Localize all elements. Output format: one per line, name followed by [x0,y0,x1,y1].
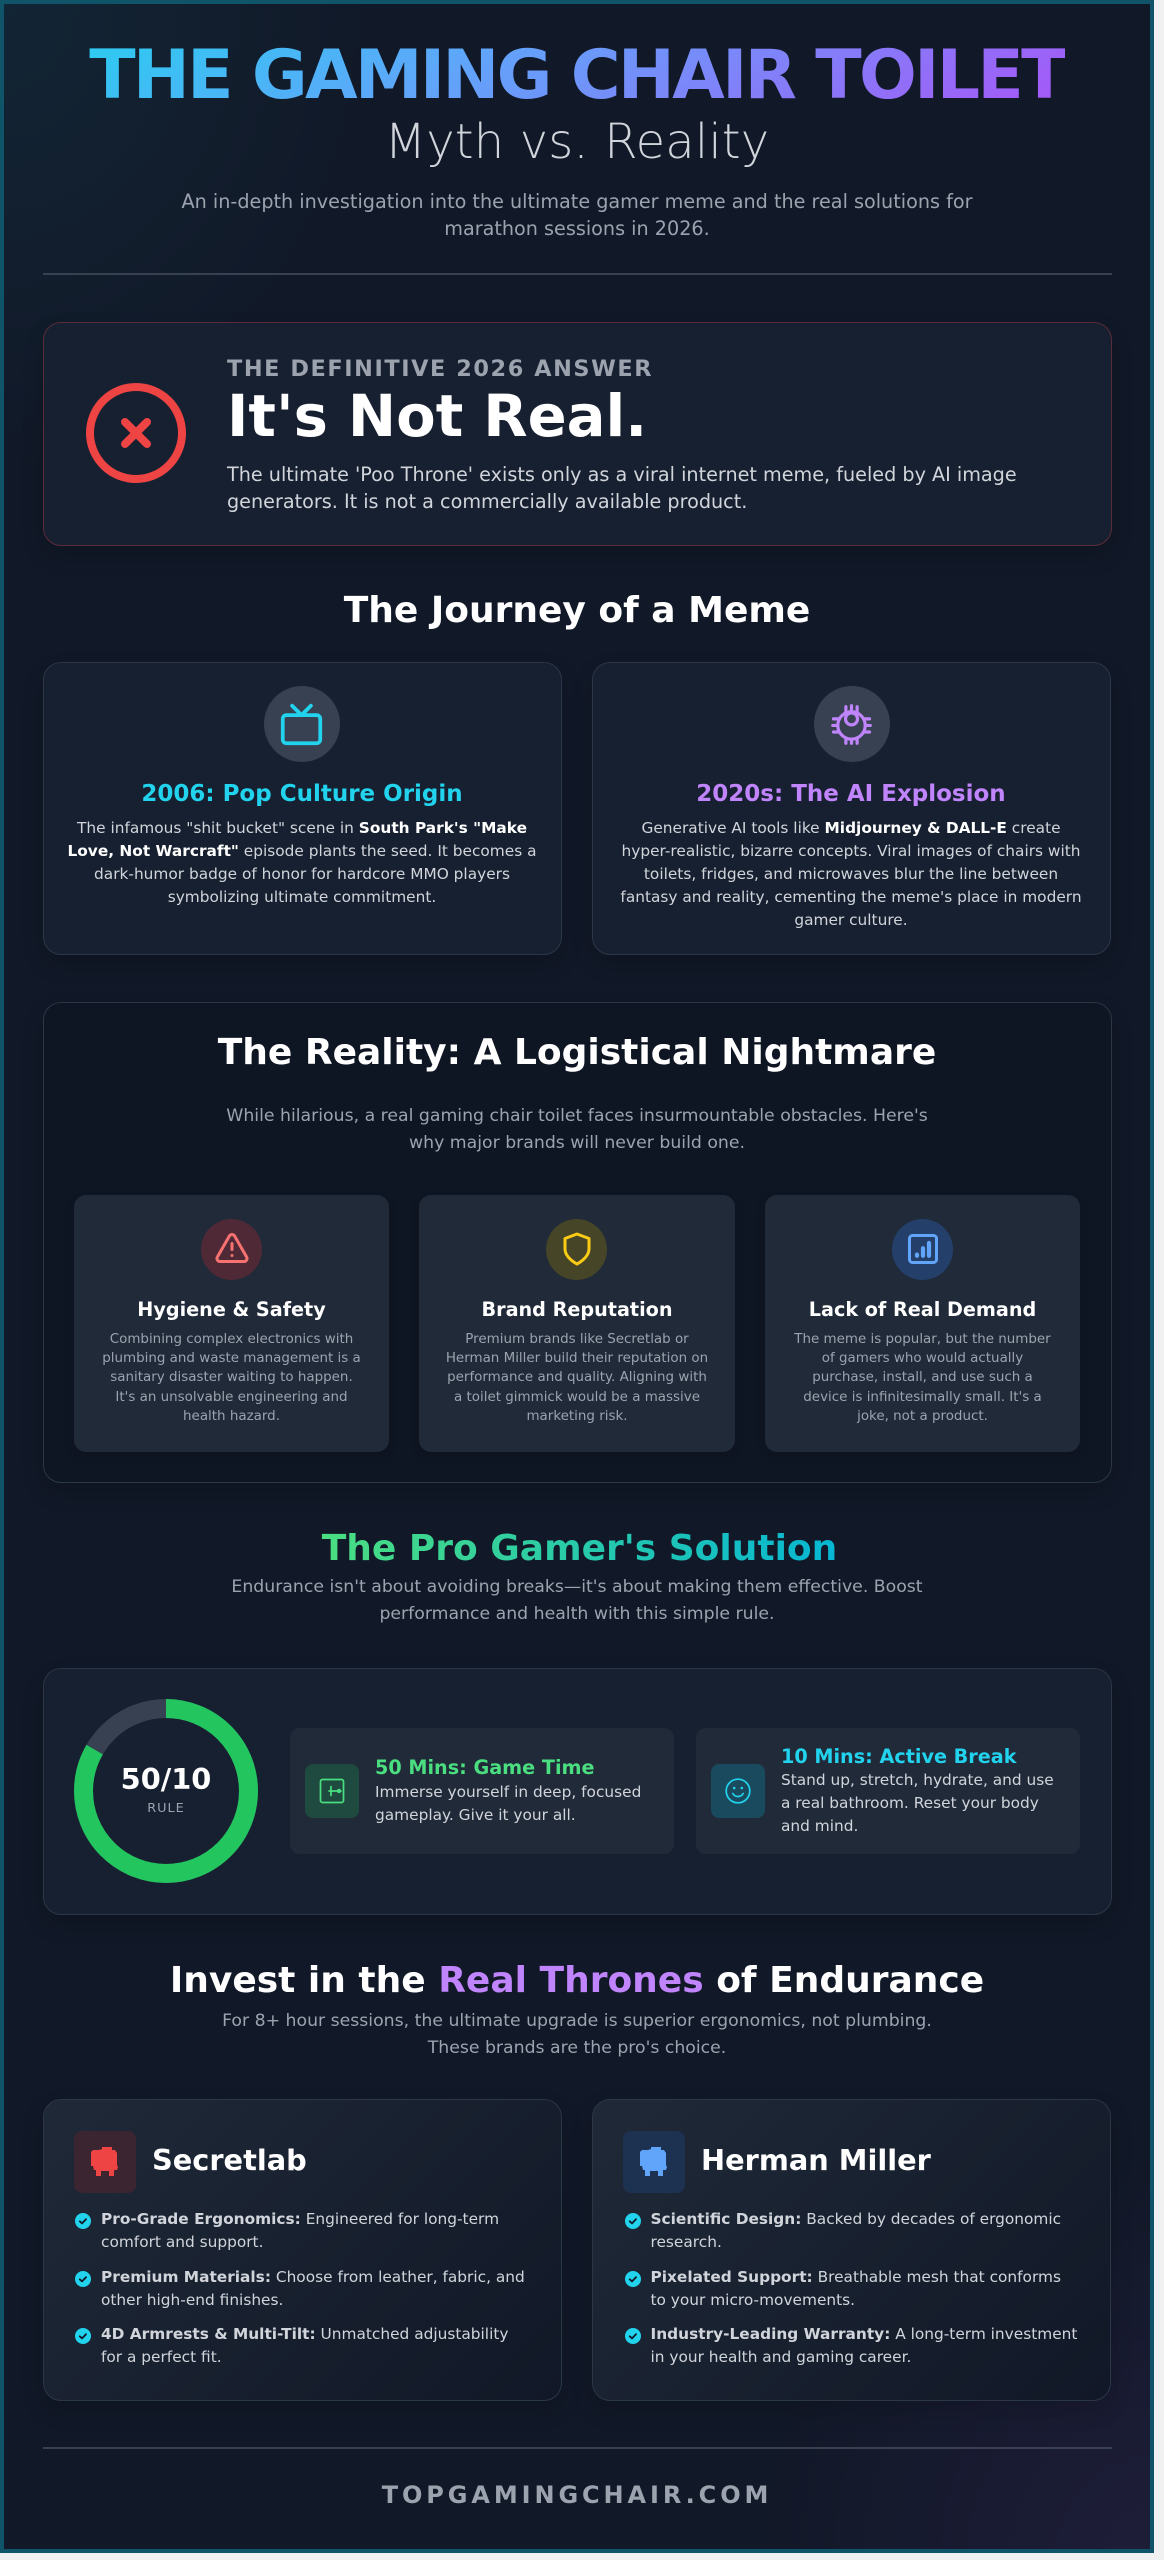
card: lack of demand [765,1195,1080,1452]
footer: TOPGAMINGCHAIR.COM [382,2481,772,2509]
feature 2: to your micro-movements. [650,2291,855,2309]
card text [620,818,1082,928]
verdict text: generators. It is not a commercially available product. [227,490,747,513]
feature 2 [625,2268,1061,2309]
feature 1 [625,2210,1061,2251]
feature 2: Pixelated Support: Breathable mesh that conforms [650,2268,1061,2286]
text: sanitary disaster waiting to happen. [110,1370,353,1385]
header [89,36,1065,240]
icon: shield [546,1219,607,1280]
text: Immerse yourself in deep, focused [375,1782,641,1800]
solution text: Endurance isn't about avoiding breaks—it's about making them effective. Boost [231,1577,923,1597]
text: joke, not a product. [857,1409,988,1424]
icon: x in circle [86,383,186,483]
text: It's an unsolvable engineering and [115,1390,348,1405]
intro text: marathon sessions in 2026. [444,217,710,240]
donut value: 50/10 [121,1762,211,1796]
text: performance and quality. Aligning with [447,1370,707,1385]
thrones text: For 8+ hour sessions, the ultimate upgrade is superior ergonomics, not plumbing. [222,2011,932,2031]
card: game time [290,1728,674,1854]
subtitle: Myth vs. Reality [385,114,769,170]
feature 1 [75,2210,499,2251]
panel: Secretlab [43,2099,562,2401]
card text: fantasy and reality, cementing the meme's place in modern [620,888,1082,906]
section text: While hilarious, a real gaming chair toilet faces insurmountable obstacles. Here's [226,1106,928,1126]
text: device is infinitesimally small. It's a [803,1390,1042,1405]
card title: 2020s: The AI Explosion [696,780,1006,806]
verdict heading: It's Not Real. [227,383,647,450]
panel: definitive answer [43,322,1112,546]
feature 2: Premium Materials: Choose from leather, fabric, and [101,2268,525,2286]
icon: blue chair [623,2131,685,2193]
feature 3: for a perfect fit. [101,2348,222,2366]
panel: Herman Miller [592,2099,1111,2401]
feature 3: in your health and gaming career. [650,2348,911,2366]
title: 10 Mins: Active Break [781,1744,1016,1768]
card text: toilets, fridges, and microwaves blur the line between [644,864,1058,882]
icon: television [264,686,340,762]
title: THE GAMING CHAIR TOILET [89,36,1065,115]
card text: hyper-realistic, bizarre concepts. Viral images of chairs with [622,842,1080,860]
feature list [625,2210,1078,2366]
title: Brand Reputation [481,1298,672,1321]
feature 3: 4D Armrests & Multi-Tilt: Unmatched adjustability [101,2325,508,2343]
title: Lack of Real Demand [809,1298,1036,1321]
card text: dark-humor badge of honor for hardcore MMO players [94,864,510,882]
card text: symbolizing ultimate commitment. [168,888,436,906]
card: active break [696,1728,1080,1854]
feature 1: research. [650,2233,722,2251]
card text: Love, Not Warcraft" episode plants the seed. It becomes a [67,842,537,860]
icon: smile [711,1764,765,1818]
text: Premium brands like Secretlab or [465,1332,689,1347]
feature 1: comfort and support. [101,2233,263,2251]
intro text: An in-depth investigation into the ultimate gamer meme and the real solutions for [182,190,972,213]
feature 1: Pro-Grade Ergonomics: Engineered for long-term [101,2210,499,2228]
text: purchase, install, and use such a [812,1370,1033,1385]
brand name: Herman Miller [701,2143,931,2177]
thrones text: These brands are the pro's choice. [428,2038,726,2058]
verdict text: The ultimate 'Poo Throne' exists only as a viral internet meme, fueled by AI image [227,463,1017,486]
verdict text [226,463,1017,513]
section heading: The Reality: A Logistical Nightmare [218,1032,936,1073]
donut chart [74,1699,258,1883]
feature 3: Industry-Leading Warranty: A long-term investment [650,2325,1077,2343]
text: a toilet gimmick would be a massive [454,1390,700,1405]
text: marketing risk. [526,1409,628,1424]
icon: AI chip [814,686,890,762]
title: 50 Mins: Game Time [375,1756,595,1778]
text: Herman Miller build their reputation on [446,1351,708,1366]
title: Hygiene & Safety [137,1298,326,1321]
text [375,1782,641,1824]
thrones text [222,2011,932,2058]
solution text: performance and health with this simple rule. [379,1604,775,1624]
icon: bar chart [892,1219,953,1280]
text: plumbing and waste management is a [102,1351,361,1366]
solution text [231,1577,923,1624]
icon: warning [201,1219,262,1280]
card text [67,818,537,906]
feature 2 [75,2268,525,2309]
feature 3 [75,2325,508,2366]
icon: game time [305,1764,359,1818]
text [446,1332,708,1424]
text: a real bathroom. Reset your body [781,1794,1039,1812]
section text [226,1106,928,1152]
panel: 50/10 rule [43,1668,1112,1914]
card text: gamer culture. [794,910,908,928]
panel: reality [43,1002,1112,1483]
text: Stand up, stretch, hydrate, and use [781,1770,1054,1788]
card text: Generative AI tools like Midjourney & DALL-E create [641,818,1061,836]
brand name: Secretlab [152,2143,307,2177]
feature 2: other high-end finishes. [101,2291,283,2309]
feature 3 [625,2325,1078,2366]
card: brand reputation [419,1195,735,1452]
eyebrow: THE DEFINITIVE 2026 ANSWER [227,356,653,382]
text: Combining complex electronics with [110,1332,353,1347]
section text: why major brands will never build one. [409,1132,745,1152]
text [102,1332,361,1424]
feature list [75,2210,525,2366]
icon: red chair [74,2131,136,2193]
panel: 2006 origin [43,662,562,955]
text: The meme is popular, but the number [794,1332,1051,1347]
text: gameplay. Give it your all. [375,1806,576,1824]
text [794,1332,1051,1424]
text: health hazard. [183,1409,280,1424]
heading: journey: The Journey of a Meme [344,590,810,631]
card: hygiene [74,1195,389,1452]
donut caption: RULE [147,1800,185,1816]
intro text [182,190,972,240]
heading: solution: The Pro Gamer's Solution [322,1528,837,1569]
text: and mind. [781,1816,858,1834]
panel: 2020s AI [592,662,1111,955]
card title: 2006: Pop Culture Origin [141,780,463,806]
card text: The infamous "shit bucket" scene in South Park's "Make [77,818,527,836]
text: of gamers who would actually [822,1351,1023,1366]
text [781,1770,1054,1834]
feature 1: Scientific Design: Backed by decades of ergonomic [650,2210,1061,2228]
heading: real thrones: Invest in the Real Thrones of Endurance [170,1960,984,2001]
